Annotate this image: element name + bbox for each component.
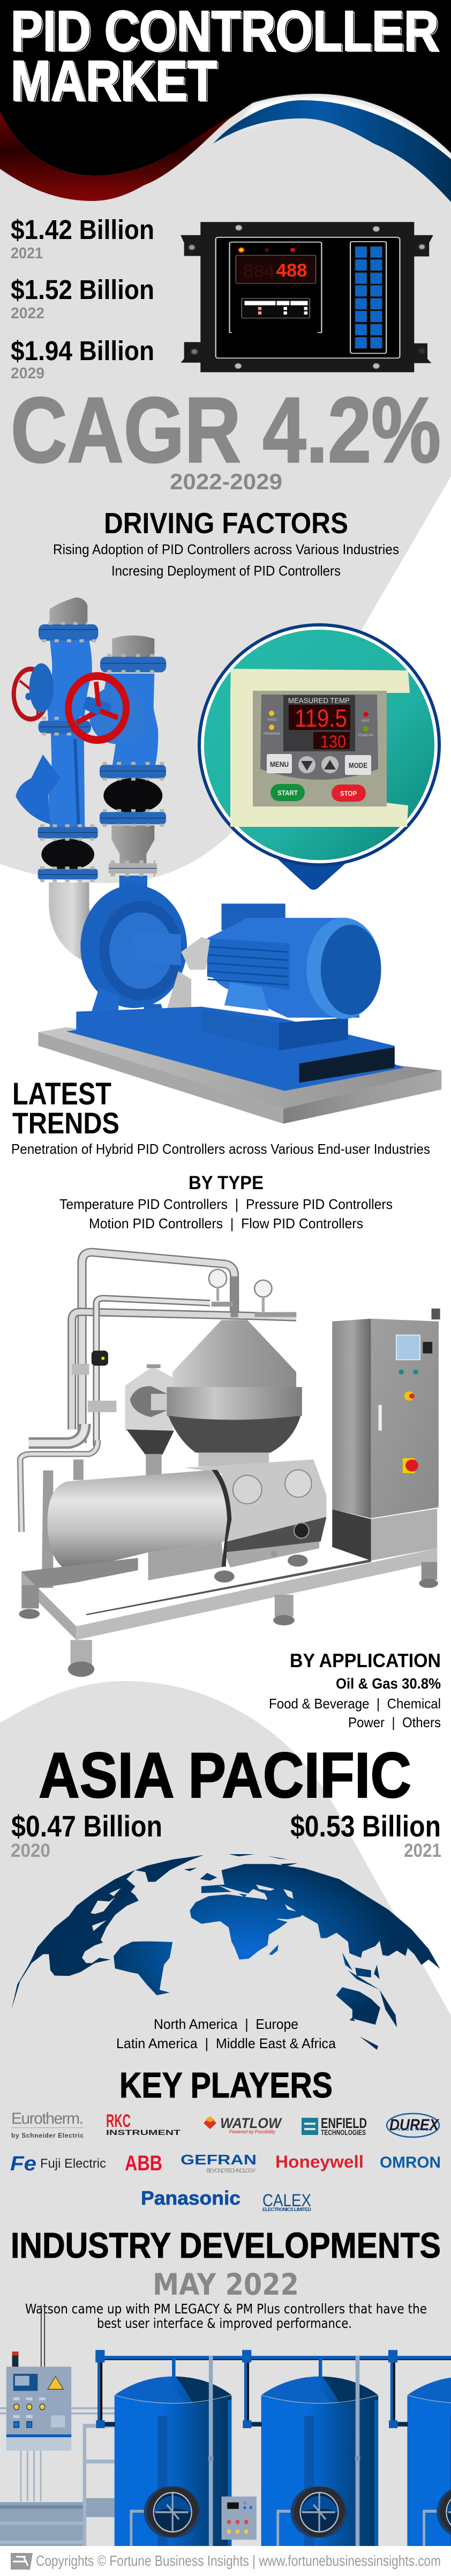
value 2020: $0.47 Billion <box>11 1809 162 1843</box>
driving factors heading: DRIVING FACTORS <box>104 506 348 540</box>
panel shell <box>230 669 410 827</box>
market values <box>11 214 154 382</box>
menu button: MENU <box>270 760 289 768</box>
value 2021: $1.42 Billion <box>11 214 154 245</box>
control box <box>6 2351 71 2451</box>
logo: Eurotherm: Eurotherm. <box>11 2110 84 2127</box>
logo: Fuji Electric <box>10 2153 106 2175</box>
icon: PID controller device: 884 <box>243 262 275 281</box>
latest trends heading <box>12 1077 119 1140</box>
regions line 1: North America | Europe <box>154 2016 298 2032</box>
title outline: MARKET <box>12 50 219 114</box>
display area <box>283 695 355 751</box>
icon: PID controller device <box>181 222 433 372</box>
logo: Gefran: BEYOND TECHNOLOGY <box>206 2168 257 2174</box>
development date: MAY 2022 <box>153 2267 299 2302</box>
control panel <box>260 695 378 780</box>
control box cable <box>41 2305 44 2366</box>
status LEDs: STAND BY <box>358 734 374 737</box>
tank box <box>148 1543 224 1580</box>
logo: Honeywell: Honeywell <box>275 2152 364 2171</box>
world map globe <box>11 1854 440 2050</box>
tank 3 <box>388 2350 451 2547</box>
logo: Durex: INDUSTRIES <box>395 2128 432 2132</box>
latest trends heading: LATEST <box>12 1077 111 1111</box>
measured temp label: MEASURED TEMP <box>288 696 350 705</box>
black header wave <box>0 0 451 176</box>
left pipe column <box>16 598 98 880</box>
tank 2 <box>242 2350 378 2547</box>
display two <box>313 732 350 749</box>
gray elbow pipe <box>49 882 95 960</box>
latest trends heading: TRENDS <box>12 1106 119 1140</box>
status LEDs: FIXED <box>267 719 277 722</box>
illustration: tanks and control panels <box>0 2305 451 2547</box>
logo: Watlow: WATLOW <box>220 2115 282 2131</box>
stop button: STOP <box>340 789 357 797</box>
menu button <box>267 754 292 773</box>
small rear handwheel <box>14 669 48 719</box>
concrete base <box>38 1027 441 1124</box>
logo: Fuji Electric: Fe <box>10 2153 36 2175</box>
small control panel <box>221 2497 257 2540</box>
reading 130: 130 <box>320 732 346 751</box>
illustration: pump on base <box>38 882 441 1124</box>
base frame <box>19 1548 438 1677</box>
tank 1 <box>95 2350 231 2547</box>
key players heading: KEY PLAYERS <box>119 2065 333 2105</box>
by type line 1: Temperature PID Controllers | Pressure PID Controllers <box>59 1196 393 1212</box>
gray background upper <box>0 0 451 883</box>
applications line 2: Power | Others <box>348 1714 441 1730</box>
red swoosh <box>0 103 253 201</box>
status LEDs: PROGRAM <box>264 733 280 736</box>
icon: PID controller device: 488 <box>276 260 307 280</box>
panel gray <box>253 691 387 807</box>
title fill: MARKET <box>11 49 217 113</box>
logo: RKC Instrument: INSTRUMENT <box>106 2128 181 2137</box>
logo: Gefran: GEFRAN <box>181 2152 257 2168</box>
circle border <box>198 623 441 867</box>
logo: RKC Instrument: RKC <box>106 2111 131 2131</box>
right pipe column <box>84 636 168 911</box>
latest trends text: Penetration of Hybrid PID Controllers across Various End-user Industries <box>11 1141 430 1157</box>
by type line 2: Motion PID Controllers | Flow PID Controllers <box>89 1215 363 1231</box>
blue baseplate <box>66 1007 404 1091</box>
logo: Eurotherm: by Schneider Electric <box>11 2132 84 2139</box>
year 2029: 2029 <box>11 365 44 382</box>
year 2020: 2020 <box>11 1840 50 1861</box>
footer logo <box>11 2553 33 2570</box>
pressure gauges <box>209 1270 272 1312</box>
blue swoosh <box>213 100 451 202</box>
mode button: MODE <box>349 761 367 770</box>
circle inner <box>201 626 438 863</box>
illustration: valves and pipe columns <box>14 598 168 911</box>
white swoosh glow <box>236 97 451 171</box>
by type heading: BY TYPE <box>189 1173 264 1193</box>
pump volute <box>80 885 187 1015</box>
start button <box>270 784 305 801</box>
logo: Panasonic: Panasonic <box>141 2187 240 2209</box>
pin tip <box>276 857 349 890</box>
development line 2: best user interface & improved performance. <box>97 2316 352 2331</box>
lower plates <box>0 2498 115 2546</box>
logo: ABB: ABB <box>125 2152 162 2175</box>
down arrow button <box>298 756 315 773</box>
oil and gas share: Oil & Gas 30.8% <box>336 1675 441 1692</box>
logo: Watlow <box>204 2115 282 2134</box>
footer band <box>0 2546 451 2576</box>
dark strap <box>212 1470 231 1566</box>
status LEDs <box>264 711 374 737</box>
separator bowl <box>167 1320 302 1466</box>
up arrow button <box>321 756 339 773</box>
logo: Calex: CALEX <box>262 2191 311 2210</box>
title <box>11 0 440 114</box>
coupling guard <box>164 971 191 1019</box>
electric motor <box>181 904 381 1019</box>
title outline <box>12 1 440 114</box>
illustration: centrifuge machine <box>19 1252 440 1677</box>
mode button <box>345 755 371 775</box>
title fill <box>11 0 439 113</box>
regions line 2: Latin America | Middle East & Africa <box>116 2035 336 2051</box>
logo: Omron: OMRON <box>380 2154 441 2171</box>
CAGR period: 2022-2029 <box>170 469 282 494</box>
year 2021: 2021 <box>11 245 43 262</box>
reading 119.5: 119.5 <box>295 704 347 732</box>
logo: Enfield: ENFIELD <box>321 2115 367 2131</box>
callout: controller circle <box>198 623 441 890</box>
gray background lower <box>0 1681 451 2576</box>
status LEDs: HEAT <box>362 720 370 723</box>
logo: Eurotherm <box>11 2110 84 2139</box>
logo: Enfield <box>302 2115 367 2137</box>
logo: Durex: DUREX <box>389 2116 440 2134</box>
display one <box>289 705 350 730</box>
circle teal fill and panel <box>204 630 434 860</box>
left tubing <box>0 2407 115 2547</box>
logo: RKC Instrument <box>106 2111 181 2137</box>
logo: Durex <box>387 2114 440 2137</box>
piping <box>20 1252 296 1532</box>
logo: Gefran <box>181 2152 257 2174</box>
logo: Enfield: TECHNOLOGIES <box>321 2128 366 2137</box>
logo: Fuji Electric: Fuji Electric <box>40 2156 106 2171</box>
by application heading: BY APPLICATION <box>290 1649 441 1671</box>
horizontal tank <box>48 1470 230 1572</box>
value 2029: $1.94 Billion <box>11 335 154 366</box>
drive housing <box>184 1459 326 1567</box>
year 2021 region: 2021 <box>404 1840 441 1861</box>
year 2022: 2022 <box>11 305 44 322</box>
back frame <box>42 1459 84 1588</box>
logo: Watlow: Powered by Possibility <box>229 2129 275 2134</box>
control cabinet <box>332 1309 440 1560</box>
driving factor 1: Rising Adoption of PID Controllers across Various Industries <box>53 541 399 557</box>
asia pacific heading: ASIA PACIFIC <box>39 1739 411 1811</box>
pipe rail <box>95 2356 451 2360</box>
start button: START <box>277 789 298 797</box>
small vessel <box>125 1364 174 1476</box>
large red handwheel <box>69 676 126 740</box>
logo: Calex: ELECTRONICS LIMITED <box>262 2207 312 2212</box>
value 2022: $1.52 Billion <box>11 274 154 305</box>
applications line 1: Food & Beverage | Chemical <box>269 1696 441 1712</box>
stop button <box>332 785 366 802</box>
driving factor 2: Incresing Deployment of PID Controllers <box>111 563 341 579</box>
